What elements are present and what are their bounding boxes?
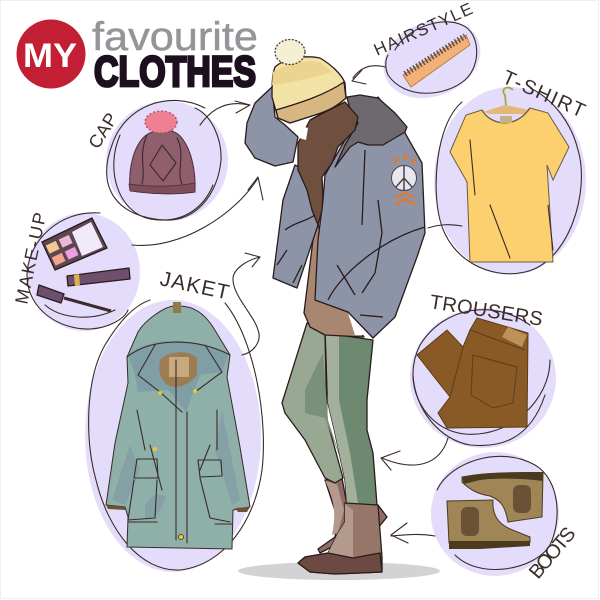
icon: upper boot <box>462 472 543 522</box>
label: make-up: MAKE-UP <box>11 211 50 306</box>
badge: MY: MY <box>23 37 77 75</box>
beanie <box>272 40 346 123</box>
coat seams <box>277 150 425 317</box>
label: cap: CAP <box>84 109 122 152</box>
arrow: make-up to figure <box>132 177 263 245</box>
title: clothes: CLOTHES <box>94 48 256 96</box>
coat <box>315 97 425 338</box>
arrow: t-shirt line <box>428 225 462 228</box>
panel: jacket <box>85 267 263 572</box>
label: jaket: JAKET <box>158 267 231 304</box>
front trouser leg <box>325 333 377 505</box>
raised sleeve <box>245 87 298 166</box>
icon: parka <box>106 302 250 549</box>
badge: MY <box>16 20 86 88</box>
title: favourite: favourite <box>92 15 258 59</box>
panel: cap <box>84 100 228 221</box>
icon: brown trousers <box>417 318 528 428</box>
panel: boots <box>431 452 580 583</box>
title logo <box>16 15 258 96</box>
figure: girl wearing the outfit <box>238 40 440 580</box>
label: hairstyle: HAIRSTYLE <box>371 0 475 60</box>
back trouser leg <box>282 323 343 483</box>
icon: mascara tube <box>67 268 130 286</box>
panel: make-up <box>11 211 140 331</box>
coat left front <box>273 165 318 288</box>
icon: hanger <box>483 87 530 114</box>
panel: hairstyle <box>371 0 492 112</box>
back boot <box>318 478 387 553</box>
icon: eyeshadow palette <box>42 218 107 270</box>
icon: knitted hat <box>129 111 195 194</box>
icon: yellow t-shirt <box>450 108 569 262</box>
label: trousers: TROUSERS <box>428 291 544 331</box>
ground shadow <box>238 562 440 580</box>
panel: trousers <box>410 291 556 448</box>
pompom <box>145 111 177 133</box>
icon: lower boot <box>447 500 530 549</box>
arrow: boots to figure <box>391 523 435 543</box>
label: boots: BOOTS <box>525 523 580 583</box>
arrow: cap to hat <box>200 101 250 125</box>
beanie pompom <box>275 40 305 64</box>
icon: comb <box>403 35 470 87</box>
front boot <box>298 503 382 574</box>
arrow: hairstyle to hat <box>352 66 385 84</box>
hair <box>298 102 358 225</box>
hood collar <box>335 95 407 167</box>
arrow: jacket to coat <box>233 253 260 355</box>
icon: mascara wand <box>37 285 111 311</box>
patch: peace badge <box>392 155 416 205</box>
brown sweater <box>304 215 364 337</box>
face <box>298 125 308 140</box>
panel: t-shirt <box>434 66 588 275</box>
label: t-shirt: T-SHIRT <box>499 66 588 122</box>
arrow: trousers to legs <box>381 438 448 470</box>
